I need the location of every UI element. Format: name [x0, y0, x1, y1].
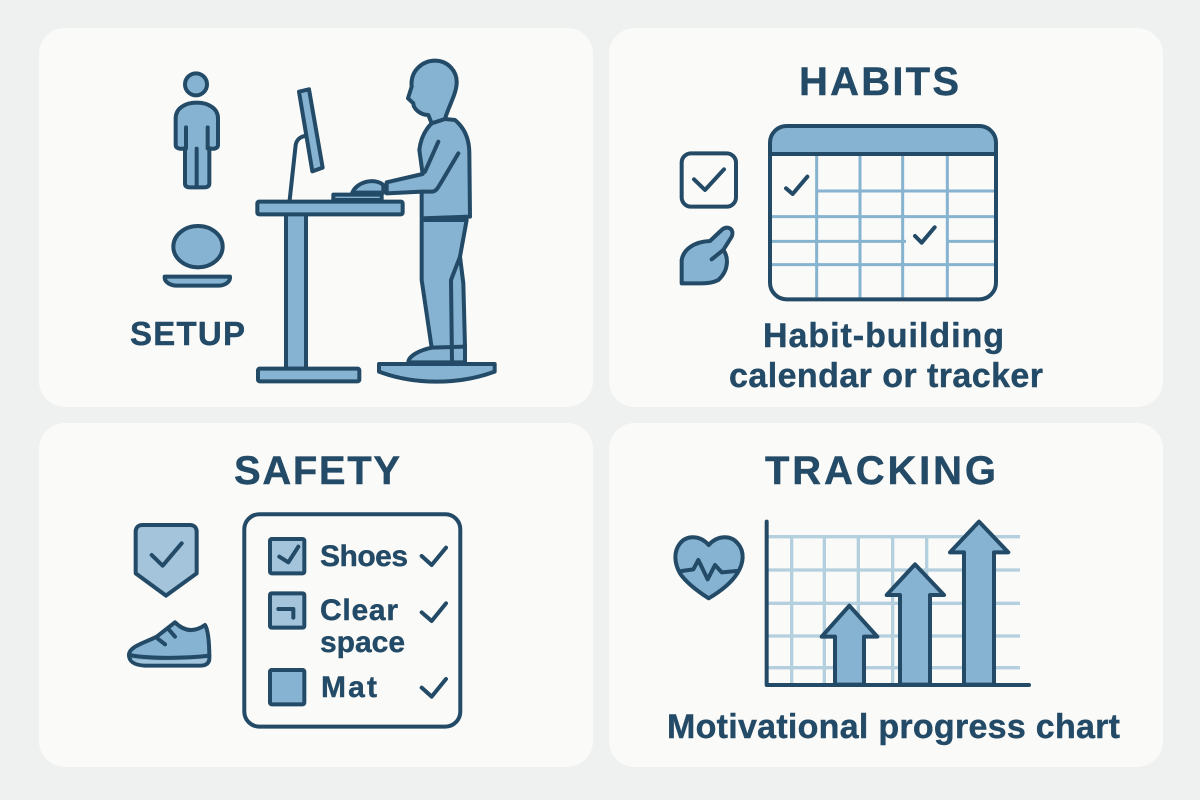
panel: safety: [39, 423, 593, 767]
caption: habit calendar: Habit-building: [763, 317, 1004, 355]
heading: tracking: TRACKING: [765, 449, 996, 493]
heading: safety: SAFETY: [234, 449, 400, 493]
habit calendar tracker: [770, 126, 996, 299]
heading: habits: HABITS: [799, 60, 959, 104]
panel: habits: [609, 28, 1163, 407]
checklist item: mat: [270, 670, 446, 704]
standing person on balance board: [352, 61, 495, 382]
check mark: later day: [915, 227, 935, 243]
checklist item: clear space: space: [320, 626, 405, 659]
icon: shoe: [129, 622, 209, 666]
arrow: medium: [887, 564, 944, 685]
check mark: first day: [786, 177, 807, 194]
safety checklist: [244, 514, 460, 727]
icon: small standing person: [176, 73, 218, 187]
caption: habit calendar: calendar or tracker: [729, 357, 1043, 395]
icon: shield with check: [136, 525, 197, 596]
panel: setup: [39, 28, 593, 407]
checklist item: shoes: [270, 539, 446, 573]
icon: pointing hand: [682, 228, 732, 283]
checklist item: mat: Mat: [321, 671, 377, 704]
checklist item: clear space: Clear: [320, 594, 398, 627]
checklist item: clear space: [270, 593, 446, 659]
heading: setup: SETUP: [130, 315, 245, 352]
standing desk with monitor: [257, 89, 403, 381]
caption: habit calendar: [729, 317, 1043, 395]
icon: checkbox: [682, 153, 736, 207]
panel: tracking: [609, 423, 1163, 767]
caption: progress chart: Motivational progress chart: [667, 708, 1120, 746]
icon: balance ball and base: [165, 226, 230, 286]
arrow: tall: [950, 522, 1008, 685]
checklist item: shoes: Shoes: [320, 540, 408, 573]
progress chart with rising arrows: [767, 522, 1029, 685]
icon: heart with pulse: [675, 537, 743, 598]
arrow: small: [822, 606, 877, 685]
